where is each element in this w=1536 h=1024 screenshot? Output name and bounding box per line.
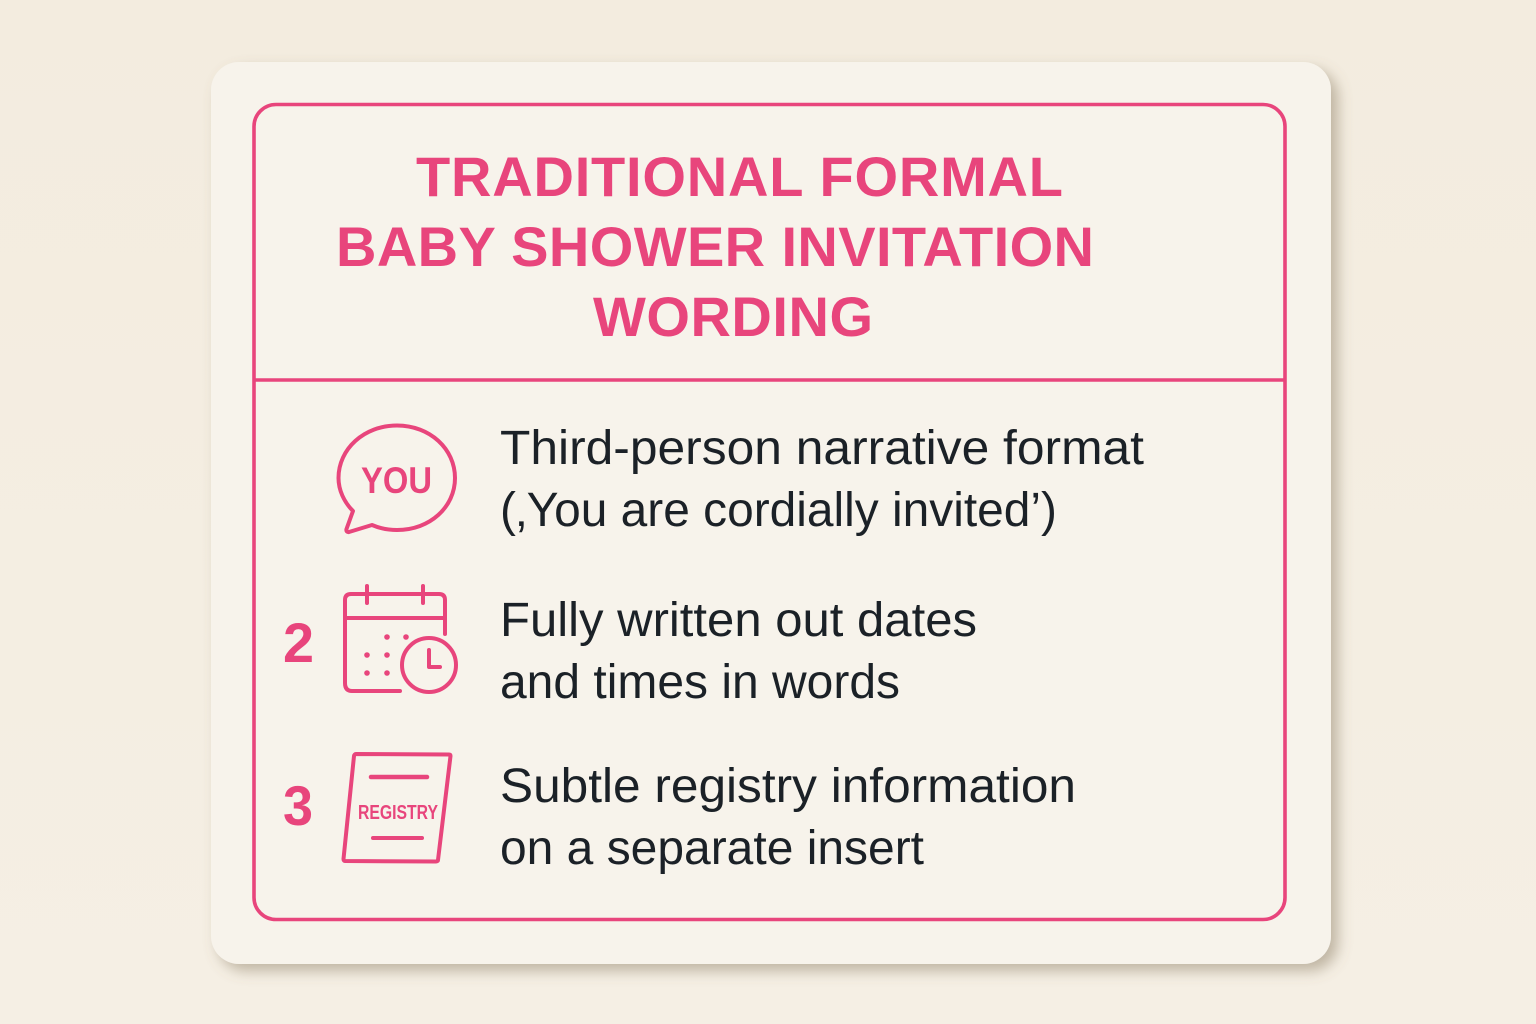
icon: YOU speech bubble: YOU (361, 460, 432, 501)
text: item 2: Fully written out dates (500, 594, 977, 647)
text: item 2: and times in words (500, 656, 900, 709)
title: TRADITIONAL FORMAL (416, 145, 1063, 208)
text: item 1: Third-person narrative format (500, 422, 1144, 475)
text: item 1 (500, 422, 1144, 537)
title: BABY SHOWER INVITATION (336, 215, 1094, 278)
number 2: 2 (283, 611, 314, 674)
text: item 3: on a separate insert (500, 822, 924, 875)
title (336, 145, 1094, 348)
panel: invitation card (211, 62, 1331, 964)
panel: pink inner frame (254, 104, 1285, 920)
number 3: 3 (283, 774, 313, 837)
text: item 1: (‚You are cordially invited’) (500, 484, 1057, 537)
text: item 3: Subtle registry information (500, 760, 1076, 813)
icon: YOU speech bubble (338, 426, 455, 532)
icon: registry insert card (344, 754, 450, 862)
icon: calendar with clock (345, 586, 456, 692)
text: item 2 (500, 594, 977, 709)
icon: registry insert card: REGISTRY (358, 802, 439, 824)
title: WORDING (593, 285, 873, 348)
text: item 3 (500, 760, 1076, 875)
